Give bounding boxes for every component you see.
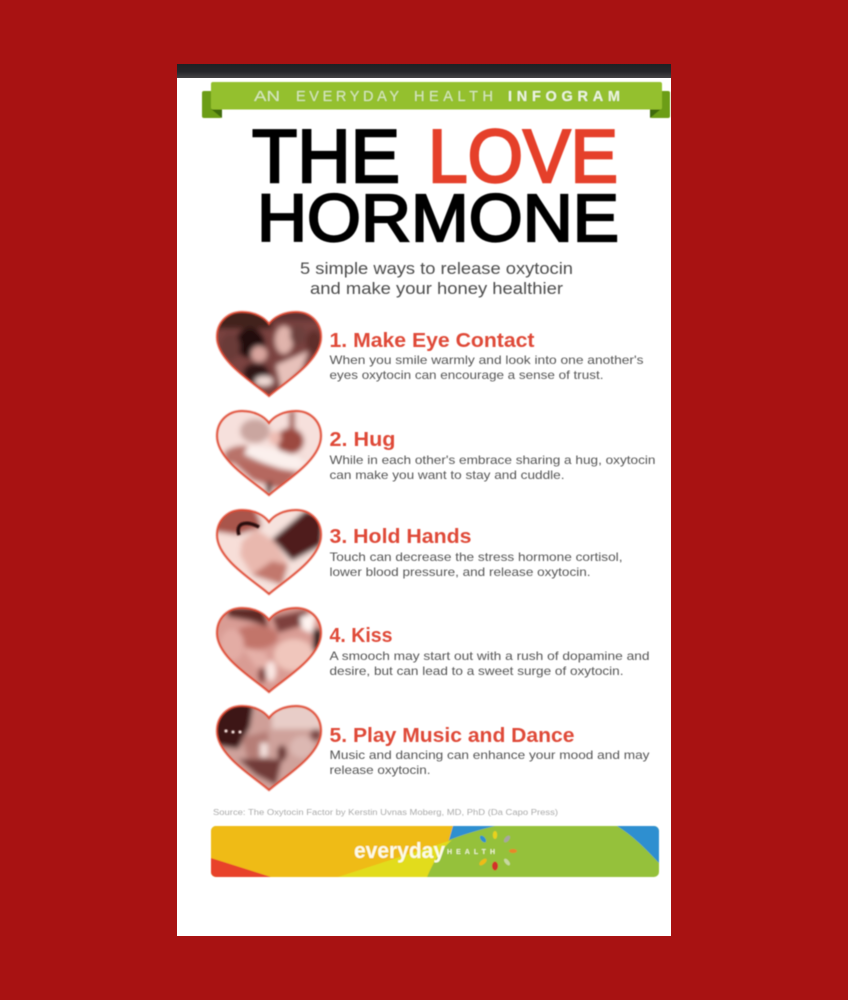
footer colour banner (211, 826, 659, 877)
step 5 text: Music and dancing can enhance your mood and may (330, 748, 650, 762)
step 2 text (330, 429, 656, 482)
white page panel (177, 64, 671, 936)
step 2 text: can make you want to stay and cuddle. (330, 468, 564, 482)
step 4 text (330, 625, 650, 678)
green ribbon banner (202, 82, 670, 118)
step 1 text (330, 330, 644, 382)
step 4 text: A smooch may start out with a rush of dopamine and (330, 649, 650, 663)
logo wordmark: HEALTH (447, 849, 495, 856)
title (252, 114, 619, 256)
subtitle (300, 259, 573, 298)
heart photo 3: holding hands (212, 505, 326, 599)
green ribbon banner: EVERYDAY (296, 89, 399, 105)
step 4 text: desire, but can lead to a sweet surge of oxytocin. (330, 664, 624, 678)
step 1 text: eyes oxytocin can encourage a sense of trust. (330, 368, 604, 382)
heart photo 5: dancing (212, 701, 326, 795)
title: LOVE (428, 114, 618, 198)
subtitle: and make your honey healthier (310, 279, 563, 298)
green ribbon banner: AN (254, 89, 280, 105)
step 3 text: 3. Hold Hands (330, 526, 472, 548)
heart photo 2: hug (212, 406, 326, 500)
step 4 text: 4. Kiss (330, 625, 392, 647)
heart photo 4: kiss (212, 603, 326, 697)
step 5 text (330, 725, 650, 777)
top dark bar (177, 64, 671, 78)
logo wordmark (354, 838, 495, 863)
step 2 text: While in each other's embrace sharing a hug, oxytocin (330, 453, 656, 467)
step 3 text: lower blood pressure, and release oxytocin. (330, 565, 590, 579)
logo wordmark: everyday (354, 838, 446, 863)
title: HORMONE (257, 181, 619, 256)
step 3 text: Touch can decrease the stress hormone cortisol, (330, 550, 622, 564)
heart photo 1: couple eye contact (212, 307, 326, 401)
step 3 text (330, 526, 622, 579)
step 5 text: 5. Play Music and Dance (330, 725, 574, 747)
green ribbon banner: INFOGRAM (508, 89, 620, 105)
step 1 text: 1. Make Eye Contact (330, 330, 535, 352)
logo sunburst (478, 831, 517, 870)
step 1 text: When you smile warmly and look into one another's (330, 353, 644, 367)
title: THE (252, 114, 400, 198)
green ribbon banner: HEALTH (414, 89, 493, 105)
source note: Source: The Oxytocin Factor by Kerstin Uvnas Moberg, MD, PhD (Da Capo Press) (213, 807, 558, 817)
step 2 text: 2. Hug (330, 429, 396, 451)
step 5 text: release oxytocin. (330, 763, 430, 777)
subtitle: 5 simple ways to release oxytocin (300, 259, 573, 278)
